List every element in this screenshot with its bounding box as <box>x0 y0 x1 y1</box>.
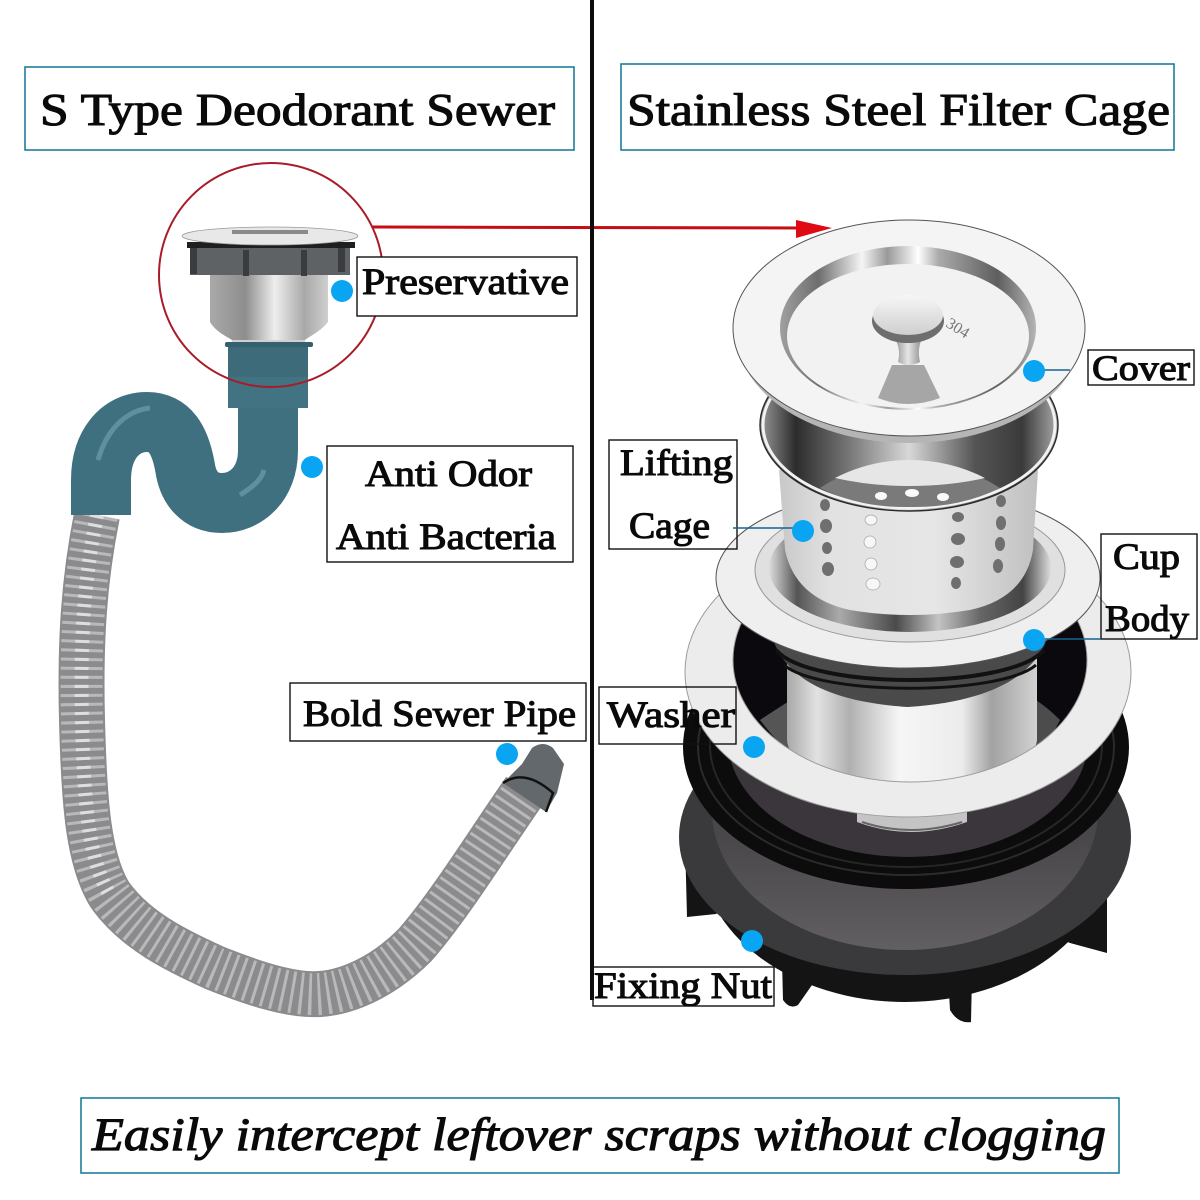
cage floor <box>820 462 1000 507</box>
corrugated sewer pipe <box>82 515 525 994</box>
S trap <box>98 385 268 515</box>
label: Bold Sewer Pipe <box>290 683 586 741</box>
threaded neck <box>857 805 967 832</box>
red arrow <box>372 220 832 238</box>
label: Preservative <box>357 257 577 316</box>
cover <box>733 220 1085 443</box>
leader: Lifting Cage <box>733 520 814 542</box>
marker: Bold Sewer Pipe <box>496 743 518 765</box>
label: Lifting Cage: Cage <box>629 506 710 547</box>
label: Cup Body: Cup <box>1113 537 1180 578</box>
pipe end connector <box>503 744 564 812</box>
label: Lifting Cage <box>609 440 737 549</box>
nut skirt and teeth <box>685 698 1110 1022</box>
title: Stainless Steel Filter Cage <box>621 64 1174 150</box>
label: Fixing Nut: Fixing Nut <box>594 966 773 1007</box>
label: Anti Odor Anti Bacteria: Anti Bacteria <box>336 517 556 558</box>
marker: Preservative <box>331 280 353 302</box>
leader: Cup Body <box>1023 629 1101 651</box>
label: Cup Body <box>1101 534 1197 640</box>
label: Bold Sewer Pipe: Bold Sewer Pipe <box>303 694 576 735</box>
label: Anti Odor Anti Bacteria <box>327 446 573 562</box>
fixing nut <box>679 670 1131 1022</box>
cage rim and interior <box>760 339 1058 511</box>
cup body flange <box>716 488 1100 668</box>
label: Anti Odor Anti Bacteria: Anti Odor <box>365 454 532 495</box>
washer ring <box>685 527 1131 817</box>
washer ring opening <box>733 538 1087 782</box>
label: Cover: Cover <box>1092 348 1190 388</box>
leader: Cover <box>1023 360 1070 382</box>
centre divider <box>590 0 594 1000</box>
cover knob <box>872 295 944 404</box>
perforations <box>875 489 949 501</box>
lower cup <box>787 640 1037 785</box>
red magnifier circle <box>159 163 383 387</box>
label: Cup Body: Body <box>1105 599 1190 640</box>
marker: Fixing Nut <box>741 930 763 952</box>
thread gasket <box>770 630 1050 707</box>
title: Stainless Steel Filter Cage: Stainless Steel Filter Cage <box>627 84 1170 135</box>
cage body <box>779 470 1038 615</box>
marker: Anti Odor <box>301 456 323 478</box>
rubber washer <box>683 605 1129 889</box>
cover bowl <box>780 246 1036 410</box>
strainer assembly <box>182 227 358 408</box>
tagline: Easily intercept leftover scraps without clogging <box>91 1109 1106 1161</box>
lifting cage <box>760 339 1058 615</box>
tagline <box>81 1098 1119 1173</box>
label: Lifting Cage: Lifting <box>620 443 733 484</box>
title: S Type Deodorant Sewer: S Type Deodorant Sewer <box>40 84 555 135</box>
title: S Type Deodorant Sewer <box>25 67 574 150</box>
stamp 304: 304 <box>943 315 972 342</box>
marker: Washer <box>743 736 765 758</box>
label: Preservative: Preservative <box>362 262 569 303</box>
label: Washer: Washer <box>607 695 735 736</box>
label: Washer <box>599 687 736 744</box>
